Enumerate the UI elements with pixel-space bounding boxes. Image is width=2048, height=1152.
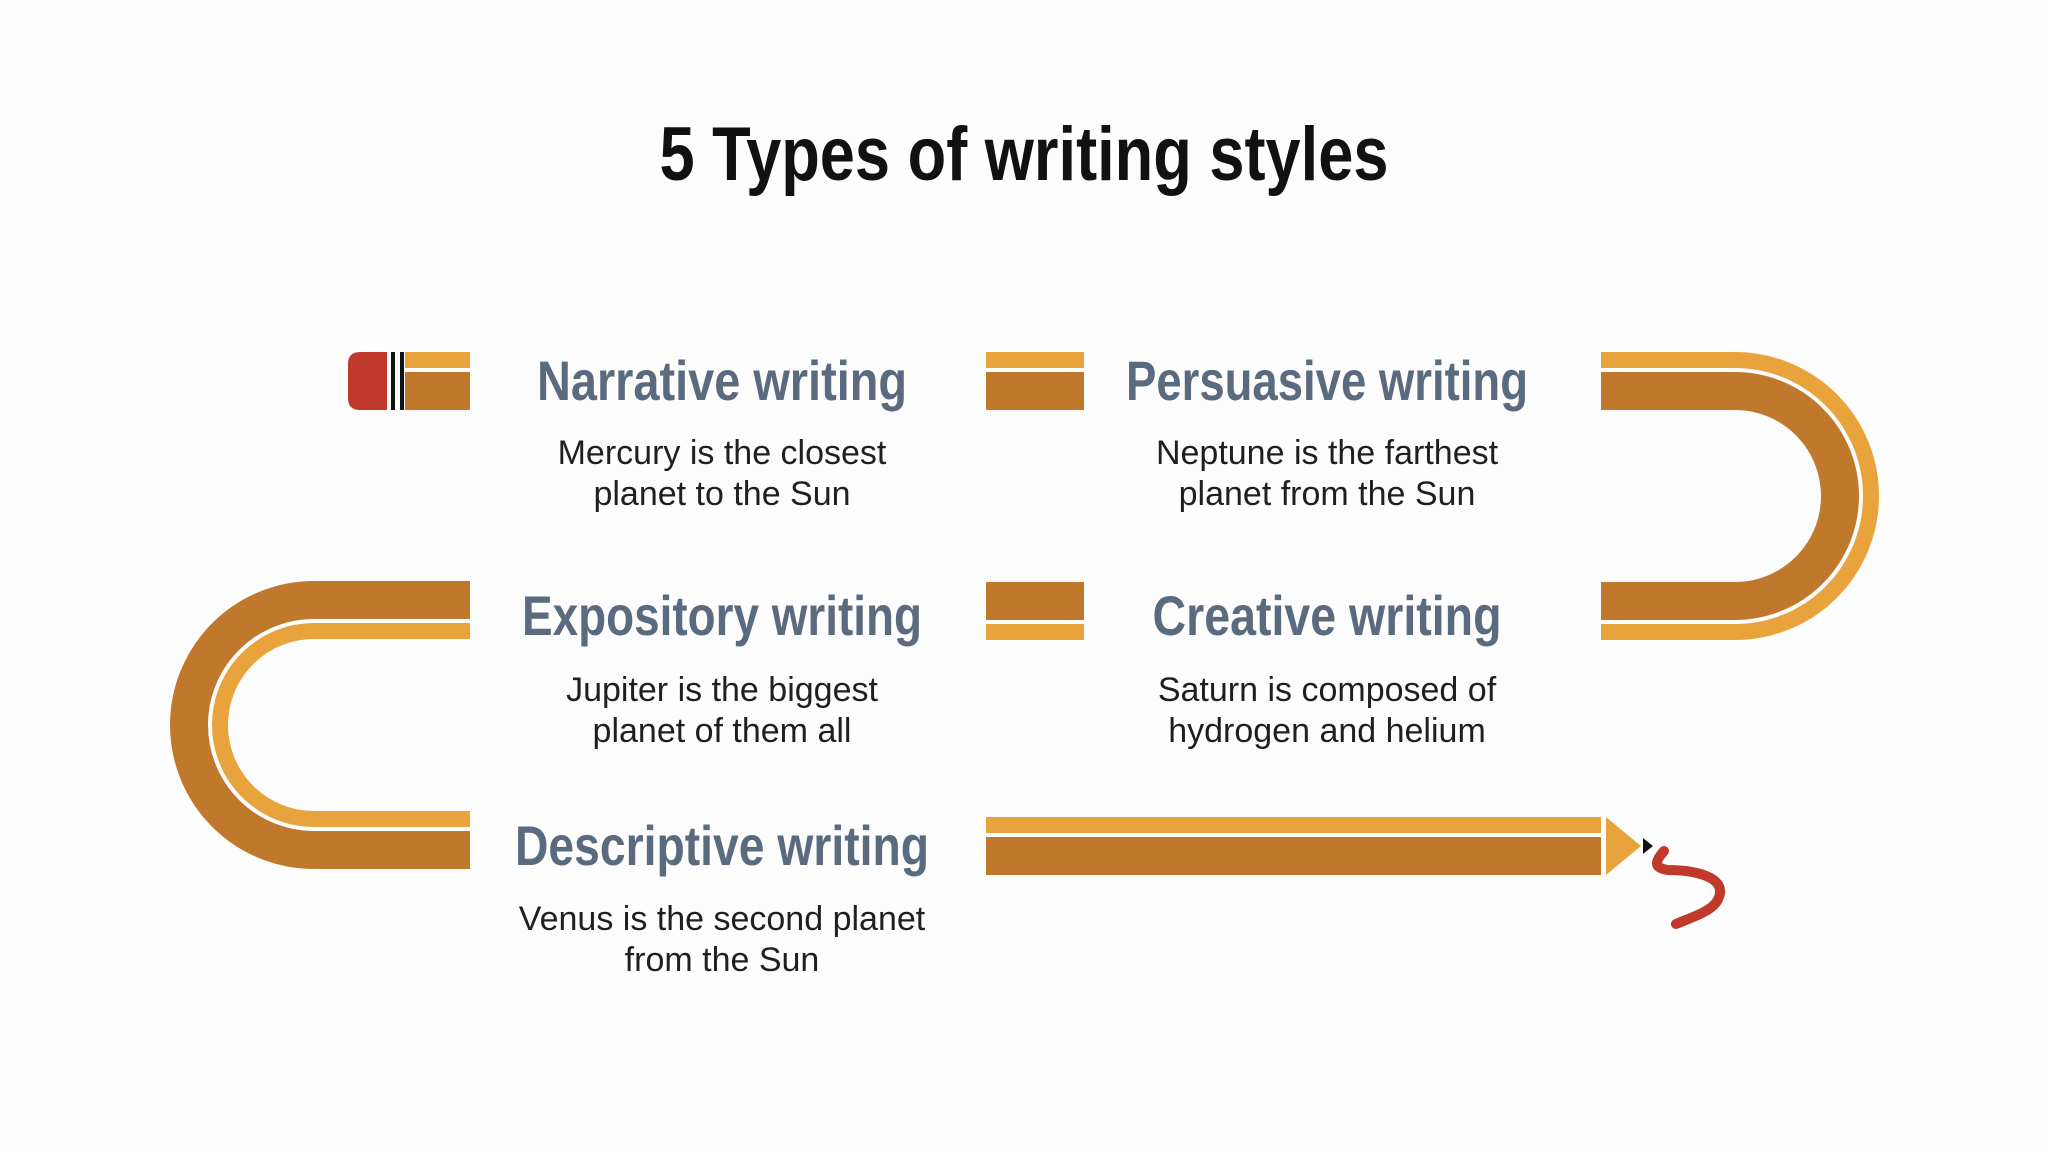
item: creative [1152,584,1502,750]
right arc [1735,360,1871,632]
item: persuasive: Persuasive writing [1126,349,1528,412]
item: narrative [537,349,907,513]
item: narrative: planet to the Sun [593,475,851,513]
item: descriptive: Descriptive writing [515,814,929,877]
row 1 segments [405,352,1735,410]
item: descriptive: Venus is the second planet [519,900,926,938]
row 3 segments [314,811,1601,875]
item: descriptive: from the Sun [625,941,819,979]
title: 5 Types of writing styles [660,112,1388,197]
item: narrative: Narrative writing [537,349,907,412]
item: expository: planet of them all [593,712,851,750]
item: persuasive: planet from the Sun [1179,475,1475,513]
item: creative: hydrogen and helium [1168,712,1486,750]
icon: red scribble [1657,851,1720,924]
icon: eraser [348,352,404,410]
item: expository: Jupiter is the biggest [566,671,878,709]
left arc [189,600,314,850]
row 2 segments [314,581,1735,640]
item: creative: Saturn is composed of [1158,671,1497,709]
item: creative: Creative writing [1152,584,1502,647]
item: expository: Expository writing [522,584,922,647]
item: persuasive: Neptune is the farthest [1156,434,1499,472]
icon: pencil tip [1606,817,1653,875]
item: expository [522,584,922,750]
item: persuasive [1126,349,1528,513]
item: descriptive [515,814,929,979]
pencil path [189,352,1871,924]
item: narrative: Mercury is the closest [558,434,887,472]
